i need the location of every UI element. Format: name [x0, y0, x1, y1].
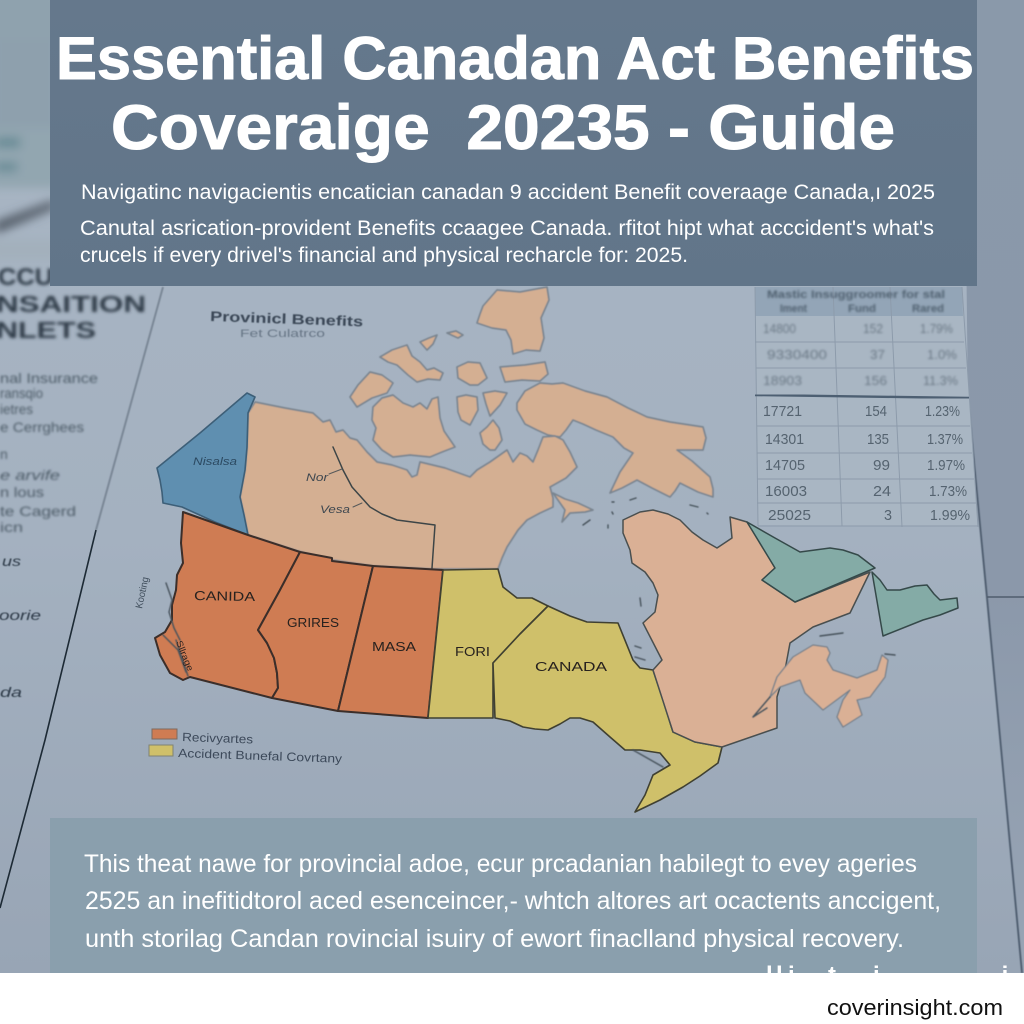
intro paragraph: Navigatinc navigacientis encatician canadan 9 accident Benefit coveraage Canada,ı 2025 — [81, 181, 935, 204]
left sheet: blurred body text: e arvife — [0, 467, 60, 483]
table rows: top, blurred — [763, 321, 958, 388]
table rows: bottom, sharper: 99 — [873, 457, 890, 474]
table rows: top, blurred: 152 — [863, 321, 883, 336]
intro paragraph: crucels if every drivel's financial and physical recharcle for: 2025. — [80, 244, 688, 267]
map of Canada — [134, 287, 958, 812]
northern leader lines — [329, 469, 362, 507]
table rows: bottom, sharper — [763, 403, 970, 524]
clipped text fragment at panel edge: lliti i — [766, 962, 1008, 989]
table rows: bottom, sharper: 24 — [873, 483, 891, 500]
map heading: Provinicl Benefits — [210, 308, 364, 329]
table rows: bottom, sharper: 14705 — [765, 457, 805, 474]
northern italic labels: Nisalsa — [193, 456, 237, 468]
bottom paragraph — [84, 850, 941, 953]
table rows: bottom, sharper: 1.23% — [925, 403, 960, 420]
table rows: top, blurred: 1.0% — [927, 347, 957, 362]
table rows: bottom, sharper: 1.37% — [927, 431, 963, 448]
northern territories and arctic islands — [240, 287, 713, 569]
northern italic labels — [193, 456, 350, 516]
map labels: FORI — [455, 644, 490, 659]
table rows: top, blurred: 18903 — [763, 373, 802, 388]
title — [56, 25, 974, 163]
title: Coveraige 20235 - Guide — [111, 93, 895, 163]
table rows: top, blurred: 37 — [870, 347, 885, 362]
footer source credit: coverinsight.com — [827, 995, 1003, 1020]
left sheet: italic side labels: da — [0, 684, 22, 700]
table rows: bottom, sharper: 17721 — [763, 403, 802, 420]
table header text: Mastic Insuggroomer for stal — [767, 289, 945, 301]
left sheet: italic side labels — [0, 553, 41, 700]
map legend — [149, 729, 342, 766]
west coast labels — [134, 576, 195, 672]
header panel — [50, 0, 977, 286]
map heading: Fet Culatrco — [240, 328, 325, 340]
bottom paragraph: unth storilag Candan rovincial isuiry of ewort finaclland physical recovery. — [85, 925, 904, 953]
table header text: Rared — [912, 303, 944, 315]
province border lines north — [333, 447, 435, 568]
left sheet: blurred body text: ransqio — [0, 385, 43, 401]
table header text — [767, 289, 945, 315]
white footer strip — [0, 973, 1024, 1024]
table rows: top, blurred: 156 — [864, 373, 887, 388]
table rows: bottom, sharper: 1.97% — [927, 457, 965, 474]
table rows: bottom, sharper: 154 — [865, 403, 887, 420]
Alaska / Yukon region — [157, 393, 255, 535]
left sheet: blurred body text: ietres — [0, 401, 33, 417]
table rows: bottom, sharper: 1.99% — [930, 507, 970, 524]
west coast labels: Kooting — [134, 576, 152, 610]
northern italic labels: Nor — [306, 472, 330, 484]
table rows: bottom, sharper: 135 — [867, 431, 889, 448]
table rows: bottom, sharper: 25025 — [768, 507, 811, 524]
bottom paragraph: This theat nawe for provincial adoe, ecur prcadanian habilegt to evey ageries — [84, 850, 917, 878]
Quebec — [623, 510, 870, 747]
data table — [755, 287, 978, 527]
table rows: bottom, sharper: 1.73% — [929, 483, 967, 500]
map labels — [194, 588, 607, 674]
left sheet: blurred heading — [0, 264, 146, 343]
intro paragraph: Canutal asrication-provident Benefits ccaagee Canada. rfitot hipt what acccident's what's — [80, 217, 934, 240]
prairie and Ontario yellow provinces — [428, 569, 722, 812]
table rows: bottom, sharper: 14301 — [765, 431, 804, 448]
intro paragraph — [80, 181, 935, 267]
left sheet: blurred body text: e Cerrghees — [0, 419, 84, 435]
Maritime provinces — [770, 645, 888, 727]
map heading — [210, 308, 364, 340]
left sheet: blurred body text: icn — [0, 519, 23, 535]
Labrador and Newfoundland — [747, 522, 958, 636]
left sheet: blurred body text — [0, 370, 98, 535]
table header text: Fund — [848, 303, 876, 315]
left sheet: blurred body text: te Cagerd — [0, 503, 76, 519]
table rows: bottom, sharper: 3 — [884, 507, 892, 524]
map labels: MASA — [372, 639, 416, 654]
map legend: Recivyartes — [182, 730, 253, 746]
left sheet: blurred body text: n lous — [0, 484, 44, 500]
table rows: top, blurred: 11.3% — [923, 373, 958, 388]
western orange provinces — [155, 512, 443, 718]
title: Essential Canadan Act Benefits — [56, 25, 974, 92]
table rows: top, blurred: 14800 — [763, 321, 796, 336]
table rows: bottom, sharper: 16003 — [765, 483, 807, 500]
west coast labels: Sllrage — [174, 639, 195, 672]
bottom paragraph: 2525 an inefitidtorol aced esenceincer,- whtch altores art ocactents anccigent, — [85, 887, 941, 915]
map labels: GRIRES — [287, 615, 339, 630]
table header text: Iment — [780, 303, 807, 315]
left sheet: blurred body text: nal Insurance — [0, 370, 98, 386]
northern italic labels: Vesa — [320, 504, 350, 516]
map labels: CANIDA — [194, 588, 256, 604]
coast details and small islands — [163, 498, 895, 767]
left sheet: blurred body text: n — [0, 446, 8, 462]
map labels: CANADA — [535, 659, 607, 674]
table rows: top, blurred: 9330400 — [767, 347, 827, 362]
table rows: top, blurred: 1.79% — [920, 321, 953, 336]
map legend: Accident Bunefal Covrtany — [178, 746, 342, 766]
bottom panel — [50, 818, 1008, 989]
left sheet: italic side labels: us — [2, 553, 21, 569]
